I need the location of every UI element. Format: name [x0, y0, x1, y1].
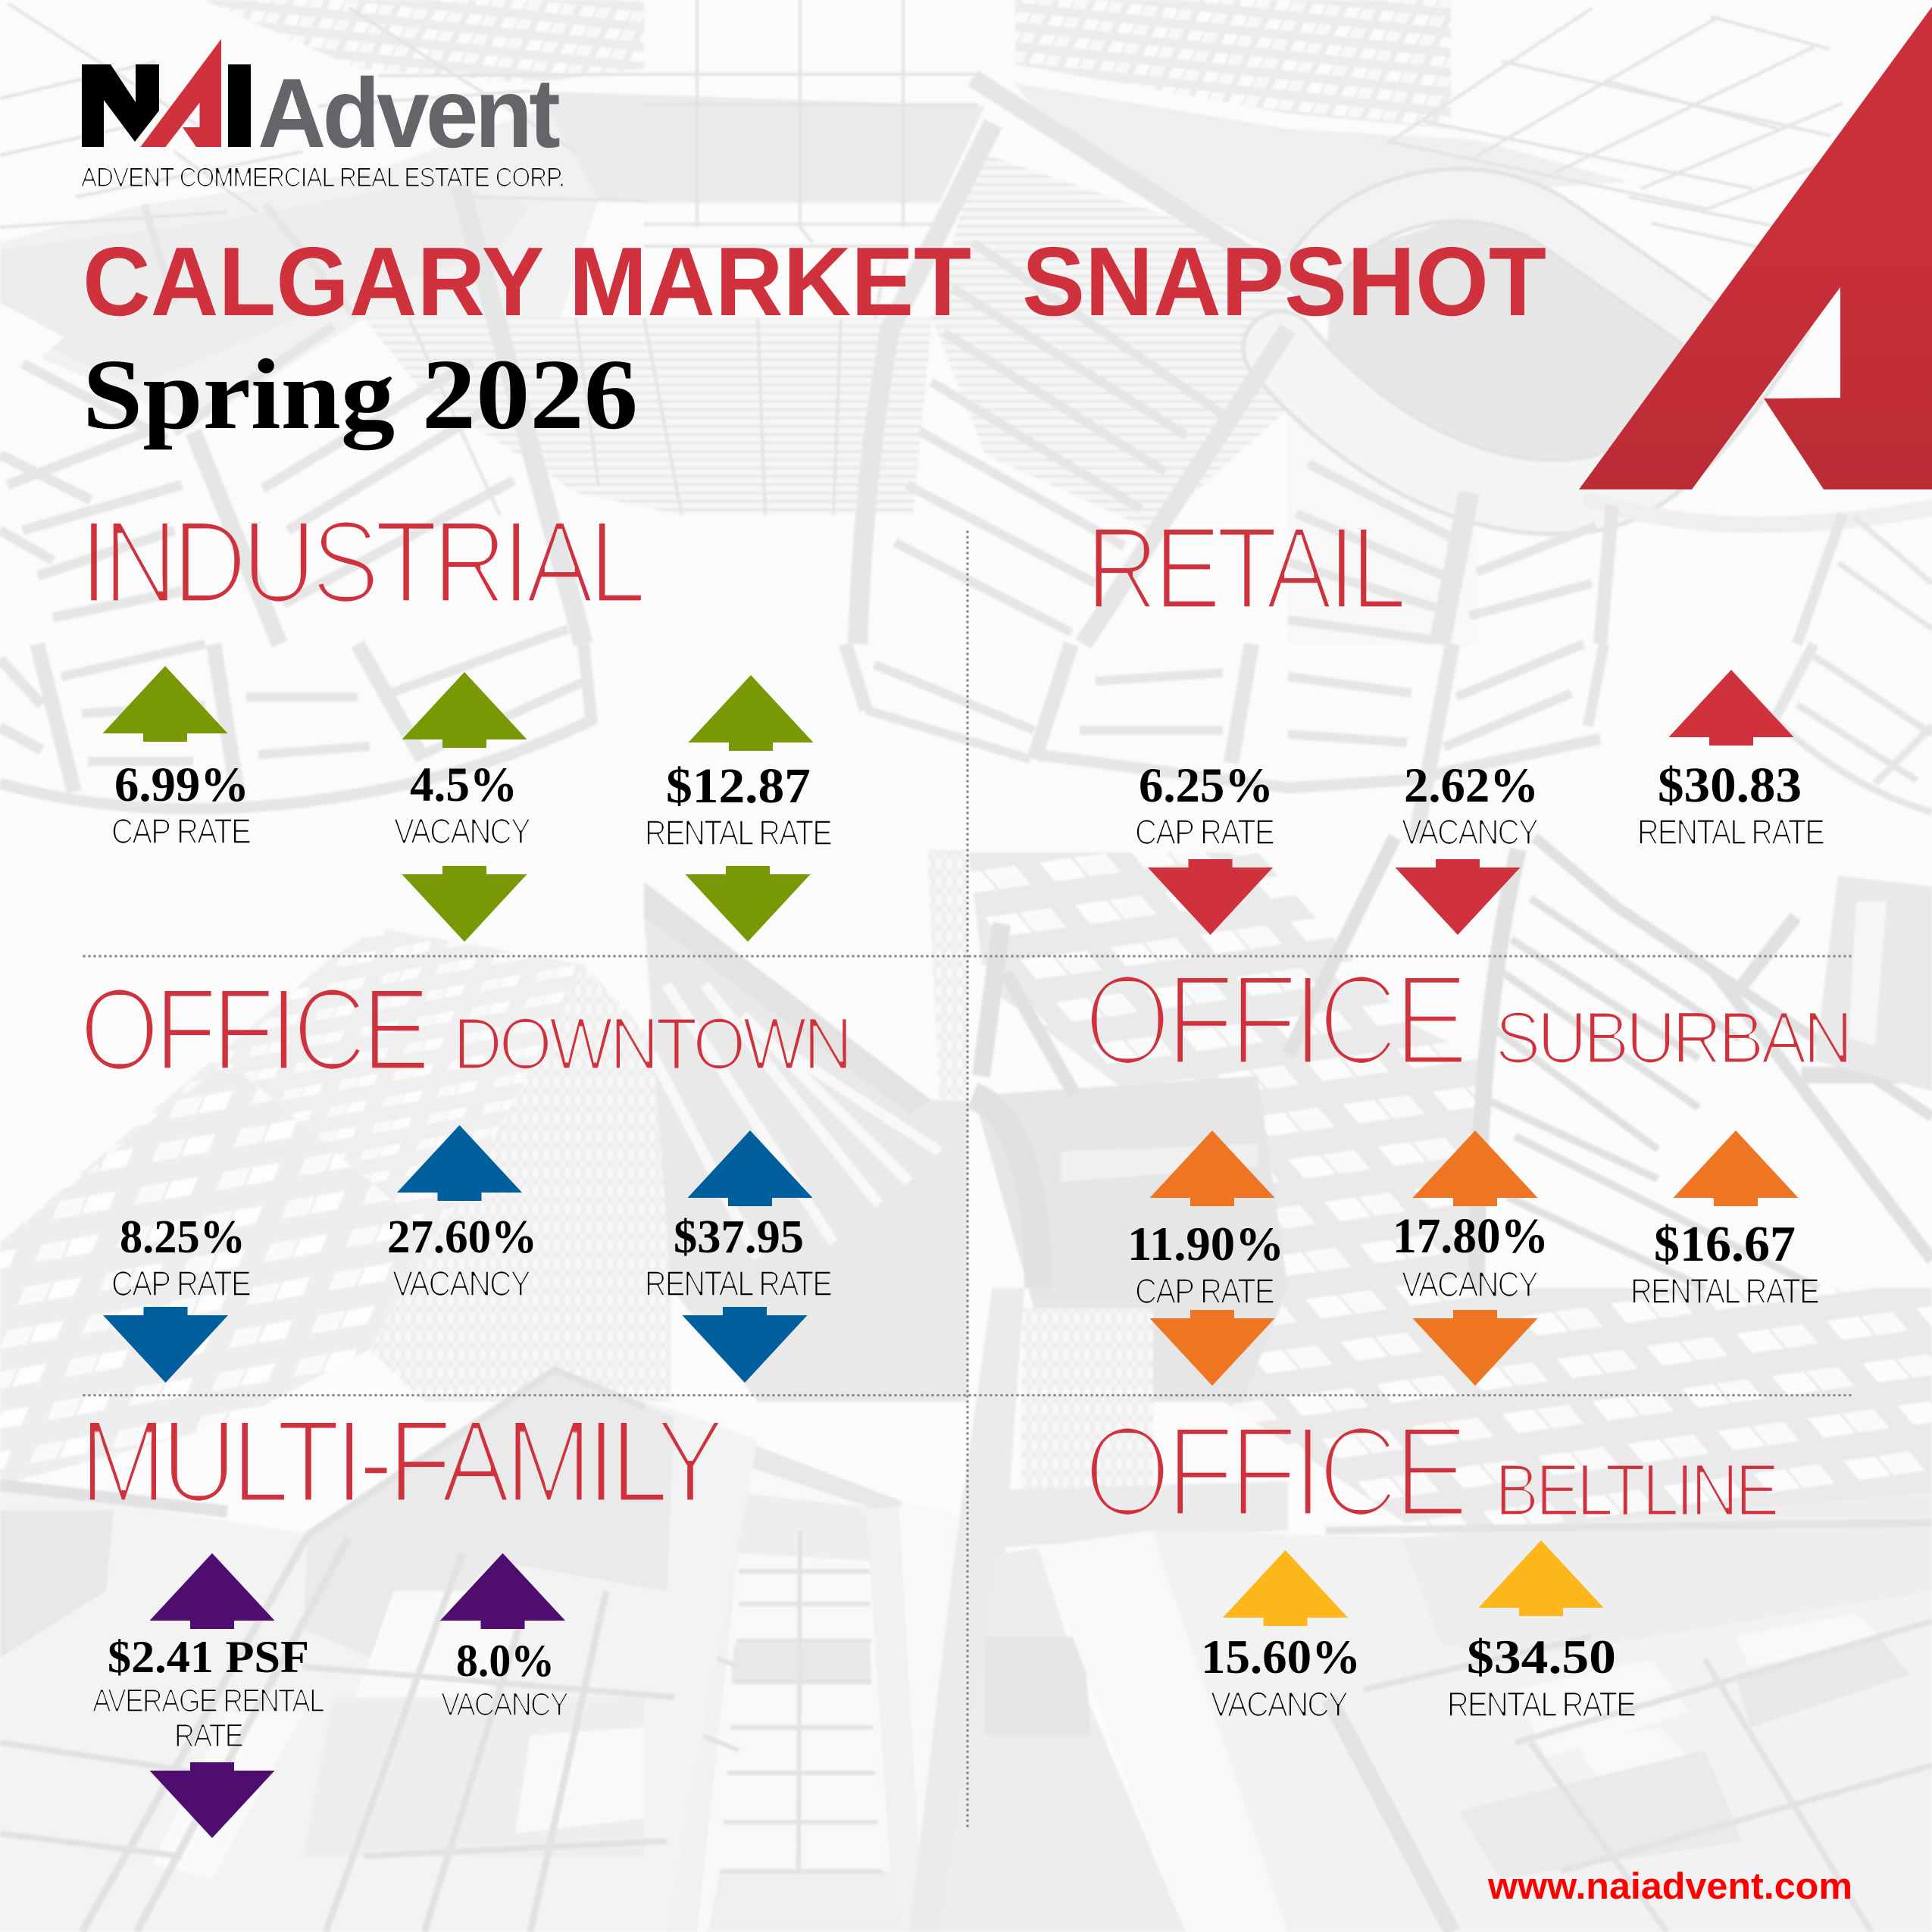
arrow up — [150, 1553, 274, 1629]
icon: NAI mark — [82, 39, 251, 147]
metric: cap rate — [103, 1211, 250, 1383]
label: VACANCY — [394, 811, 530, 851]
arrow down — [1396, 859, 1520, 935]
metric: cap rate — [103, 666, 250, 851]
value: $12.87 — [666, 758, 811, 814]
arrow down — [402, 866, 527, 942]
heading: Retail: RETAIL — [1086, 502, 1404, 633]
heading: Office Downtown: OFFICE — [80, 964, 426, 1095]
website link: www.naiadvent.com — [1487, 1866, 1852, 1907]
label: CAP RATE — [1135, 812, 1274, 852]
metric: vacancy — [387, 1125, 537, 1303]
arrow up — [103, 666, 227, 742]
label: AVERAGE RENTAL — [92, 1683, 324, 1719]
arrow up — [1668, 670, 1794, 746]
heading: Office Downtown: DOWNTOWN — [453, 1002, 849, 1085]
heading: Office Suburban: OFFICE — [1083, 948, 1465, 1093]
heading: Office Beltline — [1083, 1399, 1777, 1544]
label: CAP RATE — [111, 1264, 250, 1303]
tagline: ADVENT COMMERCIAL REAL ESTATE CORP. — [81, 163, 564, 192]
corner graphic: red A — [1579, 7, 1932, 489]
panel: Multi-Family — [80, 1396, 723, 1838]
value: 11.90% — [1127, 1217, 1284, 1271]
value: 17.80% — [1393, 1208, 1549, 1264]
label: RENTAL RATE — [645, 1264, 831, 1303]
arrow down — [1412, 1310, 1538, 1386]
arrow up — [402, 672, 527, 748]
label: CAP RATE — [111, 811, 250, 851]
panel: Retail — [1086, 502, 1824, 935]
heading: Office Beltline: BELTLINE — [1495, 1449, 1777, 1531]
arrow up — [440, 1553, 565, 1629]
metric: average rental rate — [92, 1553, 324, 1838]
value: $34.50 — [1467, 1630, 1616, 1683]
heading: Office Suburban — [1083, 948, 1849, 1093]
heading: Multi-Family: MULTI-FAMILY — [80, 1396, 723, 1527]
arrow up — [1150, 1130, 1274, 1206]
metric: rental rate — [645, 1130, 831, 1383]
label: VACANCY — [1402, 812, 1538, 852]
arrow down — [1150, 1310, 1274, 1386]
arrow up — [1479, 1540, 1603, 1616]
label: RENTAL RATE — [1637, 812, 1824, 852]
metric: vacancy — [1201, 1550, 1361, 1724]
value: 6.99% — [114, 758, 249, 812]
panel: Office Suburban — [1083, 948, 1849, 1386]
heading: Office Downtown — [80, 964, 849, 1095]
value: 6.25% — [1139, 758, 1274, 813]
arrow up — [688, 675, 814, 751]
arrow up — [1223, 1550, 1348, 1626]
label: VACANCY — [1211, 1685, 1349, 1724]
metric: rental rate — [1447, 1540, 1636, 1724]
title — [83, 227, 1546, 336]
panel: Office Beltline — [1083, 1399, 1777, 1724]
label: RATE — [174, 1718, 242, 1754]
arrow up — [1412, 1130, 1538, 1206]
metric: vacancy — [440, 1553, 568, 1723]
label — [92, 1683, 324, 1754]
heading: Office Suburban: SUBURBAN — [1495, 996, 1849, 1079]
heading: Industrial: INDUSTRIAL — [80, 496, 643, 627]
value: 27.60% — [387, 1211, 537, 1263]
value: 2.62% — [1404, 758, 1539, 813]
logo: NAI Advent — [81, 39, 564, 192]
arrow down — [682, 1307, 808, 1383]
panel: Industrial — [80, 496, 831, 942]
value: 8.0% — [456, 1636, 555, 1686]
label: VACANCY — [392, 1264, 530, 1303]
panel: Office Downtown — [80, 964, 849, 1383]
subtitle: Spring 2026 — [83, 338, 638, 450]
value: $37.95 — [674, 1211, 804, 1263]
dotted dividers — [84, 532, 1853, 1827]
arrow up — [397, 1125, 522, 1201]
metric: vacancy — [1393, 1130, 1549, 1386]
wordmark: Advent: Advent — [258, 58, 560, 168]
label: RENTAL RATE — [1447, 1685, 1636, 1724]
arrow down — [150, 1762, 274, 1838]
metric: vacancy — [1396, 758, 1539, 935]
value: $30.83 — [1658, 758, 1802, 813]
arrow down — [685, 866, 811, 942]
metric: cap rate — [1135, 758, 1274, 935]
heading: Office Beltline: OFFICE — [1083, 1399, 1465, 1544]
arrow down — [103, 1307, 228, 1383]
label: RENTAL RATE — [645, 813, 831, 852]
value: $2.41 PSF — [108, 1632, 309, 1682]
value: 15.60% — [1201, 1630, 1361, 1683]
arrow down — [1148, 859, 1273, 935]
value: 4.5% — [410, 758, 517, 812]
label: CAP RATE — [1135, 1271, 1274, 1311]
label: VACANCY — [1402, 1265, 1538, 1304]
metric: rental rate — [645, 675, 831, 942]
title: SNAPSHOT — [1022, 227, 1546, 336]
title: CALGARY MARKET — [83, 227, 971, 336]
metric: rental rate — [1630, 1130, 1818, 1311]
arrow up — [1673, 1130, 1799, 1206]
metric: cap rate — [1127, 1130, 1284, 1386]
value: $16.67 — [1654, 1216, 1796, 1272]
label: VACANCY — [441, 1687, 568, 1723]
arrow up — [688, 1130, 812, 1206]
metric: rental rate — [1637, 670, 1824, 852]
label: RENTAL RATE — [1630, 1271, 1818, 1311]
value: 8.25% — [120, 1211, 245, 1263]
metric: vacancy — [394, 672, 530, 942]
